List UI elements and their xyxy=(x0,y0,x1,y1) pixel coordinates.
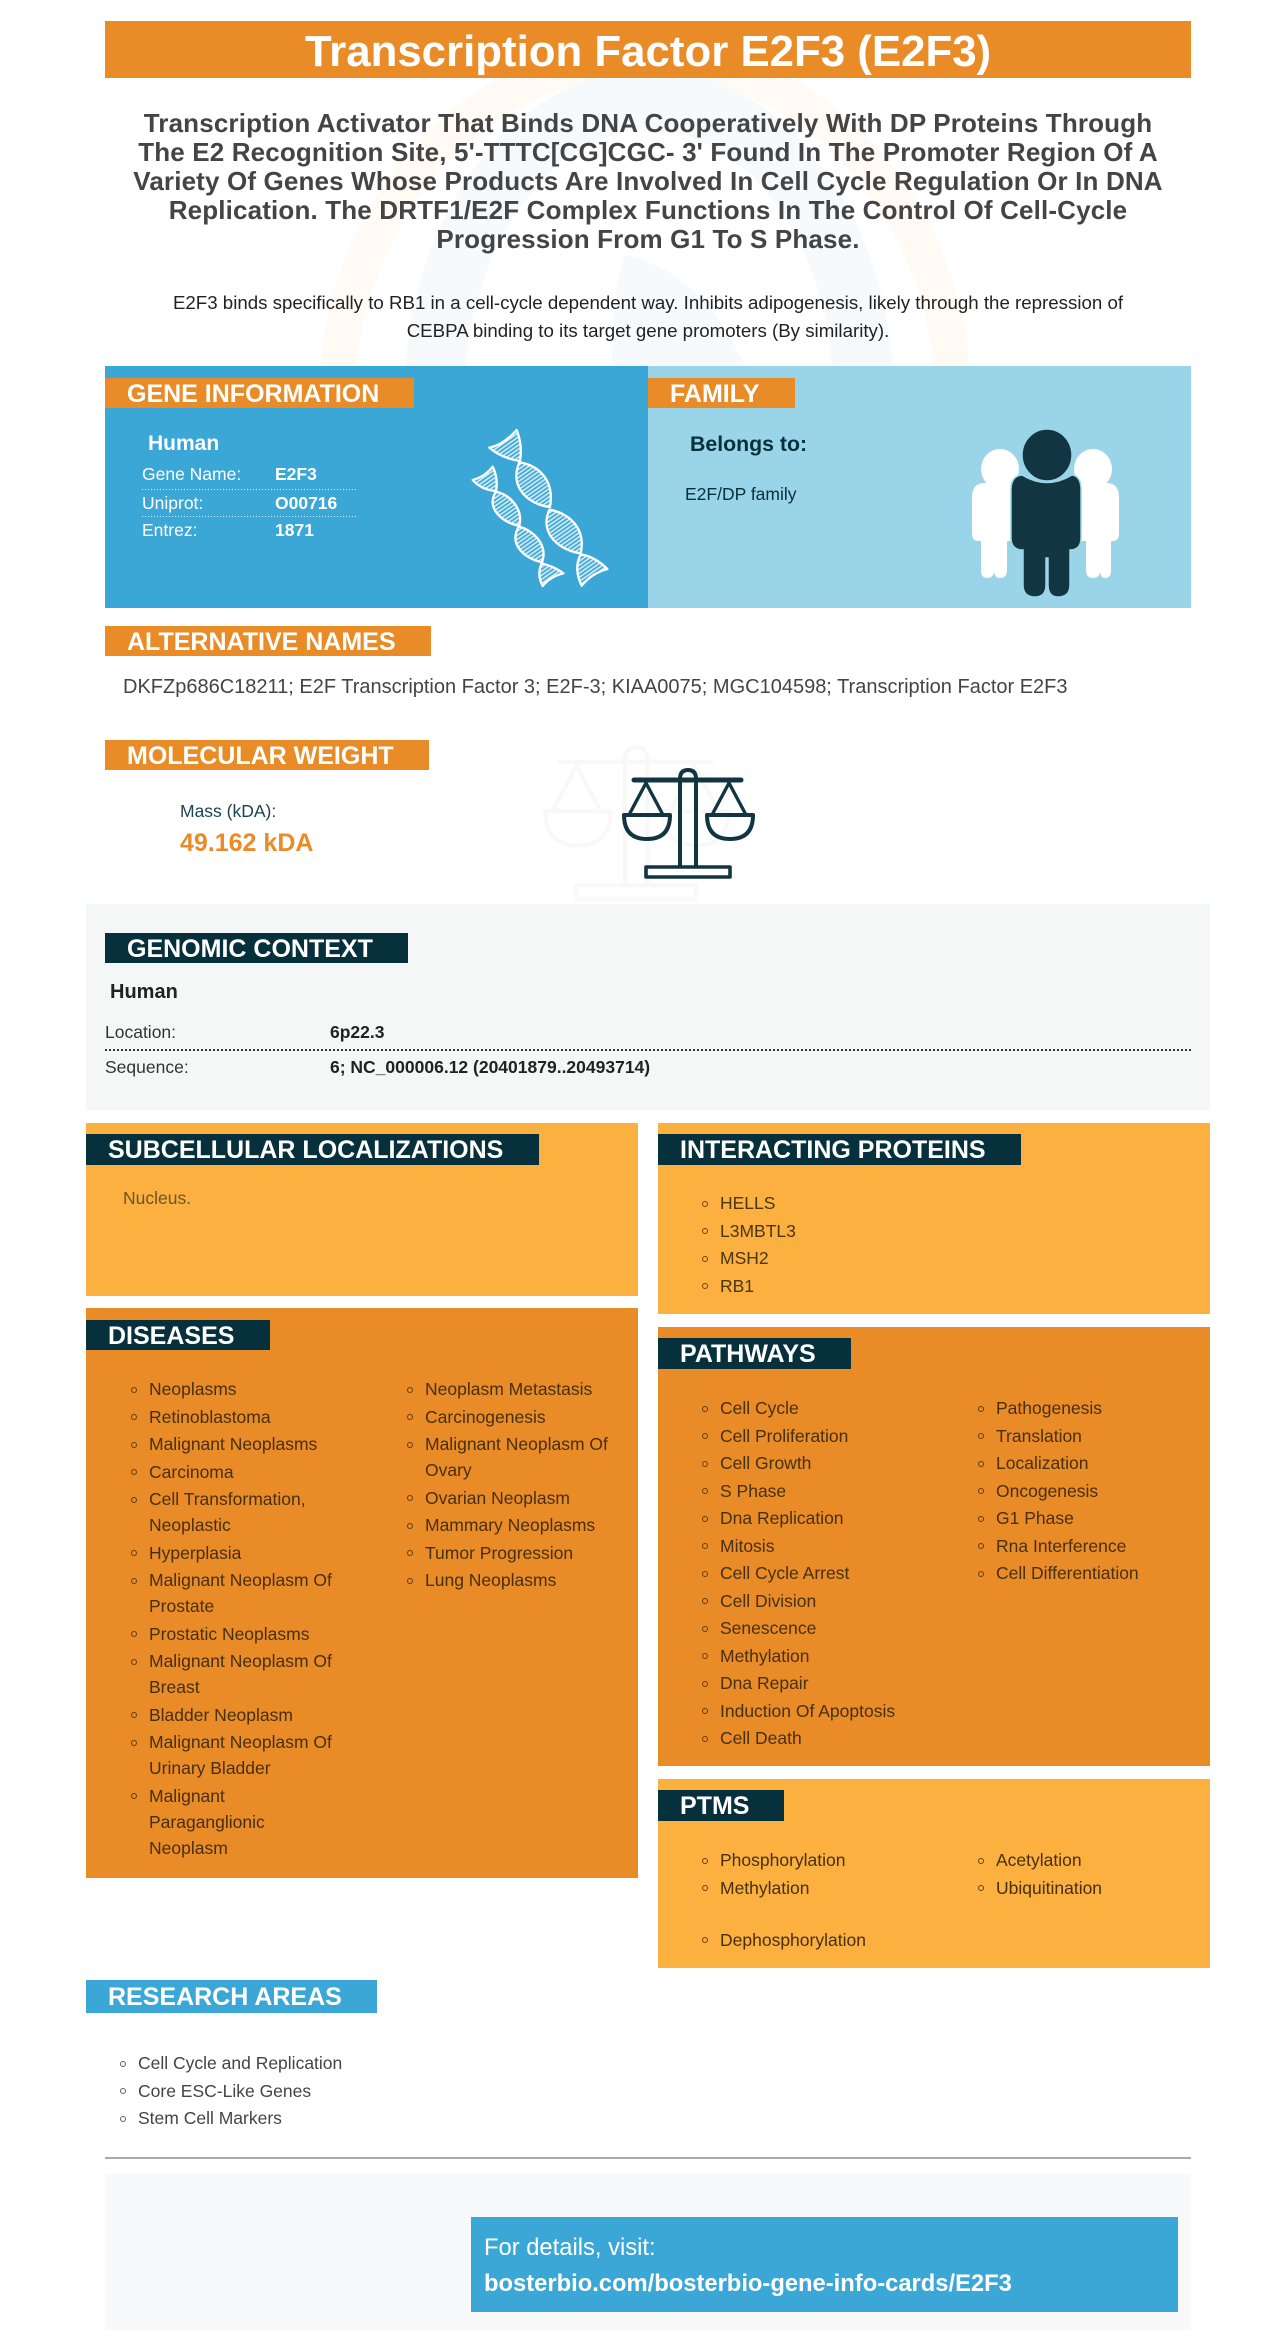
diseases list column 2: Carcinogenesis xyxy=(425,1406,546,1426)
PTMs list column 2 xyxy=(978,1850,1102,1898)
entrez row: Entrez: xyxy=(142,520,197,540)
pathways list column 2 xyxy=(978,1398,1139,1583)
heading: pathways xyxy=(658,1338,851,1369)
panel: interacting proteins xyxy=(658,1123,1210,1314)
pathways list column 1: Cell Death xyxy=(720,1728,802,1748)
icon: DNA helix xyxy=(472,428,608,588)
subtitle summary: The E2 Recognition Site, 5'-TTTC[CG]CGC- 3' Found In The Promoter Region Of A xyxy=(138,137,1158,167)
heading: family: FAMILY xyxy=(670,380,759,408)
gene fields table xyxy=(142,464,356,540)
diseases list column 1: Neoplasms xyxy=(149,1379,237,1399)
diseases list column 1: Breast xyxy=(149,1677,200,1697)
location row: 6p22.3 xyxy=(330,1022,384,1042)
location row: Location: xyxy=(105,1022,176,1042)
pathways list column 1: Cell Division xyxy=(720,1590,816,1610)
description text: E2F3 binds specifically to RB1 in a cell-cycle dependent way. Inhibits adipogenesis, likely through the repression of xyxy=(173,292,1123,313)
research areas list xyxy=(120,2053,342,2128)
subtitle summary: Transcription Activator That Binds DNA Cooperatively With DP Proteins Through xyxy=(144,108,1152,138)
pathways list column 1: Cell Growth xyxy=(720,1453,811,1473)
sequence row: Sequence: xyxy=(105,1057,189,1077)
icon: balance scale ghost and solid xyxy=(622,768,755,879)
interacting proteins list xyxy=(702,1193,796,1296)
species label: Human xyxy=(110,981,178,1003)
diseases list column 1: Malignant Neoplasm Of xyxy=(149,1732,332,1752)
description text: CEBPA binding to its target gene promoters (By similarity). xyxy=(407,320,889,341)
panel: genomic context xyxy=(86,904,1210,1110)
pathways list column 2: Rna Interference xyxy=(996,1536,1126,1556)
diseases list column 1: Malignant Neoplasms xyxy=(149,1434,317,1454)
mass value: 49.162 kDA xyxy=(180,829,313,857)
gene name row: Gene Name: xyxy=(142,464,241,484)
callout: details link xyxy=(471,2217,1178,2312)
panel: diseases xyxy=(86,1308,638,1878)
PTMs list column 1 xyxy=(702,1850,866,1950)
entrez row: 1871 xyxy=(275,520,314,540)
diseases list column 1: Cell Transformation, xyxy=(149,1489,306,1509)
pathways list column 2: Translation xyxy=(996,1426,1082,1446)
diseases list column 1: Carcinoma xyxy=(149,1462,234,1482)
diseases list column 2: Malignant Neoplasm Of xyxy=(425,1434,608,1454)
heading: subcellular localizations: SUBCELLULAR LOCALIZATIONS xyxy=(108,1136,503,1164)
row divider xyxy=(142,489,357,490)
research areas list: Cell Cycle and Replication xyxy=(138,2053,342,2073)
uniprot row: Uniprot: xyxy=(142,493,203,513)
footer panel xyxy=(105,2173,1191,2331)
pathways list column 1: Cell Proliferation xyxy=(720,1426,848,1446)
PTMs list column 2: Acetylation xyxy=(996,1850,1082,1870)
belongs to label: Belongs to: xyxy=(690,432,807,456)
diseases list column 1: Urinary Bladder xyxy=(149,1758,271,1778)
heading: genomic context: GENOMIC CONTEXT xyxy=(127,935,373,963)
pathways list column 1: Methylation xyxy=(720,1646,810,1666)
diseases list column 1: Neoplasm xyxy=(149,1838,228,1858)
heading: PTMs: PTMS xyxy=(680,1792,749,1820)
heading: research areas xyxy=(86,1980,377,2013)
subtitle summary: Replication. The DRTF1/E2F Complex Functions In The Control Of Cell-Cycle xyxy=(169,195,1127,225)
interacting proteins list: L3MBTL3 xyxy=(720,1220,796,1240)
species label: Human xyxy=(148,432,219,455)
panel: pathways xyxy=(658,1327,1210,1766)
heading: molecular weight: MOLECULAR WEIGHT xyxy=(127,742,394,770)
heading: diseases: DISEASES xyxy=(108,1322,234,1350)
subtitle summary: Progression From G1 To S Phase. xyxy=(436,224,860,254)
subtitle summary xyxy=(133,108,1163,254)
pathways list column 2: Oncogenesis xyxy=(996,1480,1098,1500)
pathways list column 1: Mitosis xyxy=(720,1536,774,1556)
interacting proteins list: MSH2 xyxy=(720,1248,769,1268)
background watermark logo xyxy=(320,78,970,366)
panel: subcellular localizations xyxy=(86,1123,638,1296)
gene name row: E2F3 xyxy=(275,464,317,484)
heading: pathways: PATHWAYS xyxy=(680,1340,816,1368)
diseases list column 2: Lung Neoplasms xyxy=(425,1570,556,1590)
diseases list column 2: Ovarian Neoplasm xyxy=(425,1488,570,1508)
diseases list column 1: Neoplastic xyxy=(149,1515,231,1535)
heading: alternative names: ALTERNATIVE NAMES xyxy=(127,628,396,656)
diseases list column 1: Malignant Neoplasm Of xyxy=(149,1651,332,1671)
interacting proteins list: RB1 xyxy=(720,1276,754,1296)
panel: PTMs xyxy=(658,1779,1210,1968)
description text xyxy=(173,292,1124,341)
PTMs list column 2: Ubiquitination xyxy=(996,1878,1102,1898)
heading: family xyxy=(648,378,795,408)
diseases list column 1: Prostate xyxy=(149,1596,214,1616)
sequence row xyxy=(105,1057,650,1077)
panel: family xyxy=(648,366,1191,608)
diseases list column 2: Tumor Progression xyxy=(425,1542,573,1562)
uniprot row xyxy=(142,493,337,513)
pathways list column 2: Cell Differentiation xyxy=(996,1563,1139,1583)
pathways list column 1: Cell Cycle xyxy=(720,1398,799,1418)
interacting proteins list: HELLS xyxy=(720,1193,775,1213)
heading: gene information: GENE INFORMATION xyxy=(127,380,379,408)
diseases list column 1: Bladder Neoplasm xyxy=(149,1704,293,1724)
title banner xyxy=(105,21,1191,78)
PTMs list column 1: Methylation xyxy=(720,1878,810,1898)
diseases list column 1: Paraganglionic xyxy=(149,1812,265,1832)
diseases list column 2: Mammary Neoplasms xyxy=(425,1515,595,1535)
localization text: Nucleus. xyxy=(123,1188,191,1208)
PTMs list column 1: Phosphorylation xyxy=(720,1850,846,1870)
heading: interacting proteins: INTERACTING PROTEINS xyxy=(680,1136,986,1164)
research areas list: Core ESC-Like Genes xyxy=(138,2080,311,2100)
diseases list column 2: Neoplasm Metastasis xyxy=(425,1379,592,1399)
location row xyxy=(105,1022,384,1042)
family value: E2F/DP family xyxy=(685,484,797,504)
heading: research areas: RESEARCH AREAS xyxy=(108,1983,342,2011)
research areas list: Stem Cell Markers xyxy=(138,2108,282,2128)
pathways list column 1 xyxy=(702,1398,895,1748)
diseases list column 2: Ovary xyxy=(425,1460,472,1480)
diseases list column 1 xyxy=(131,1379,332,1858)
visit label: For details, visit: xyxy=(484,2234,656,2261)
pathways list column 1: Dna Replication xyxy=(720,1508,844,1528)
heading: PTMs xyxy=(658,1790,784,1821)
pathways list column 2: G1 Phase xyxy=(996,1508,1074,1528)
sequence row: 6; NC_000006.12 (20401879..20493714) xyxy=(330,1057,650,1077)
subtitle summary: Variety Of Genes Whose Products Are Involved In Cell Cycle Regulation Or In DNA xyxy=(133,166,1163,196)
pathways list column 1: Dna Repair xyxy=(720,1673,809,1693)
pathways list column 1: Senescence xyxy=(720,1618,816,1638)
pathways list column 2: Localization xyxy=(996,1453,1088,1473)
uniprot row: O00716 xyxy=(275,493,337,513)
heading: diseases xyxy=(86,1320,270,1350)
PTMs list column 1: Dephosphorylation xyxy=(720,1930,866,1950)
pathways list column 2: Pathogenesis xyxy=(996,1398,1102,1418)
row divider xyxy=(142,516,357,517)
mass label: Mass (kDA): xyxy=(180,801,276,821)
panel: gene information xyxy=(105,366,648,608)
icon: group of people xyxy=(972,430,1119,596)
diseases list column 1: Malignant xyxy=(149,1786,225,1806)
diseases list column 1: Malignant Neoplasm Of xyxy=(149,1570,332,1590)
diseases list column 1: Hyperplasia xyxy=(149,1542,241,1562)
diseases list column 1: Retinoblastoma xyxy=(149,1406,271,1426)
entrez row xyxy=(142,520,314,540)
url: bosterbio.com/bosterbio-gene-info-cards/E2F3 xyxy=(484,2270,1012,2297)
pathways list column 1: S Phase xyxy=(720,1480,786,1500)
alternative names text: DKFZp686C18211; E2F Transcription Factor 3; E2F-3; KIAA0075; MGC104598; Transcription Factor E2F3 xyxy=(123,676,1068,698)
gene name row xyxy=(142,464,317,484)
title banner: Transcription Factor E2F3 (E2F3) xyxy=(305,27,991,76)
pathways list column 1: Cell Cycle Arrest xyxy=(720,1563,849,1583)
pathways list column 1: Induction Of Apoptosis xyxy=(720,1700,895,1720)
diseases list column 2 xyxy=(407,1379,608,1590)
diseases list column 1: Prostatic Neoplasms xyxy=(149,1624,309,1644)
